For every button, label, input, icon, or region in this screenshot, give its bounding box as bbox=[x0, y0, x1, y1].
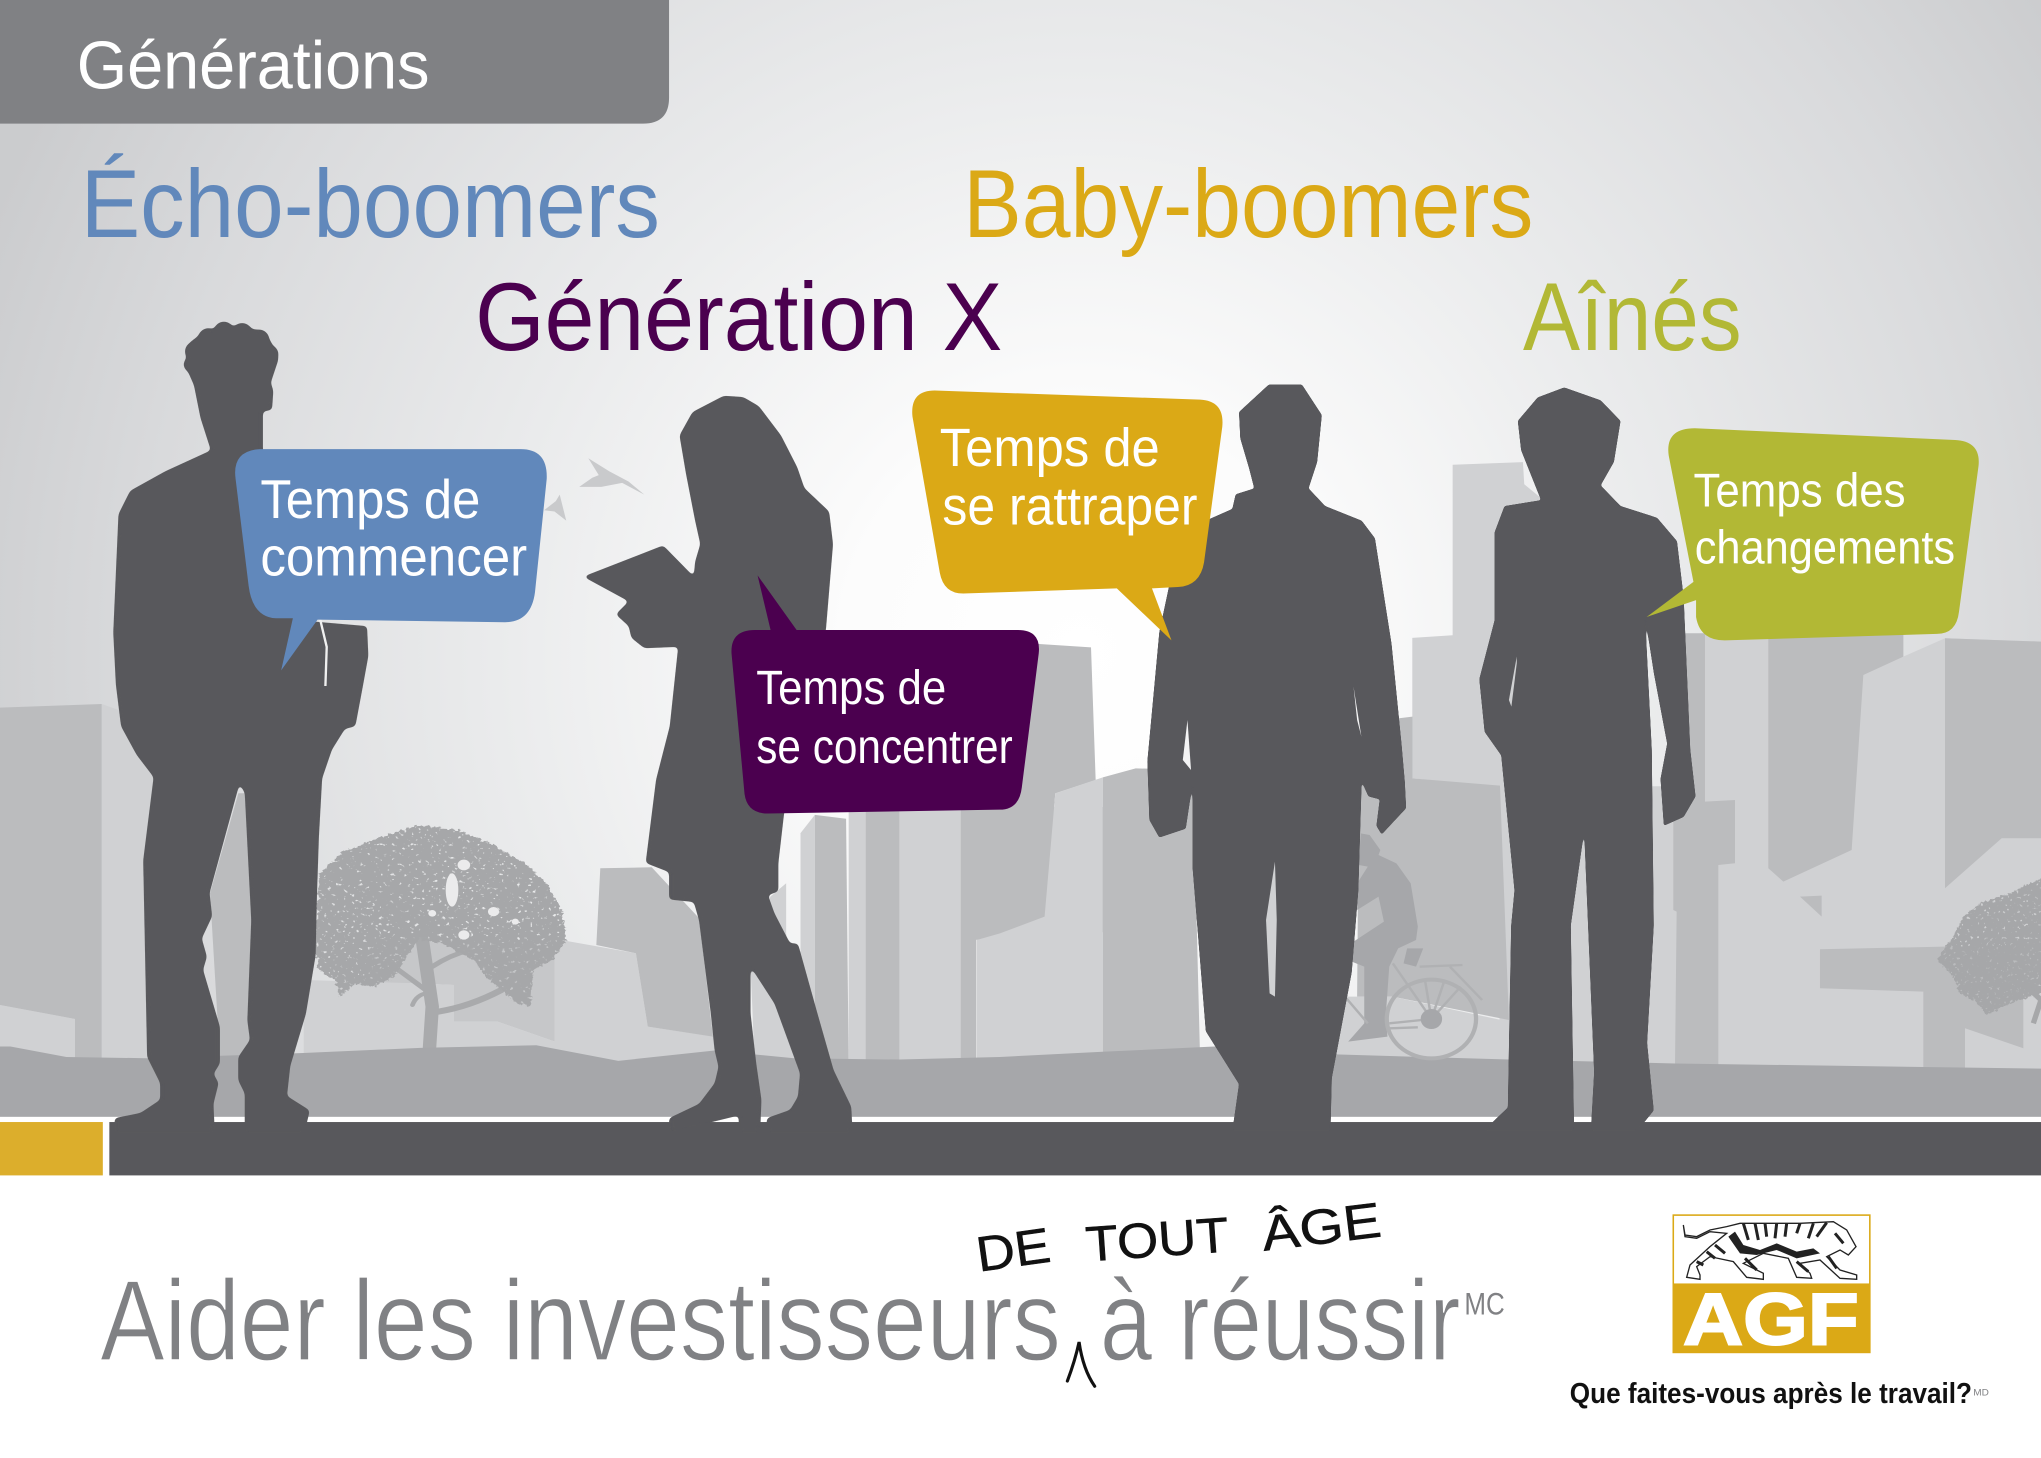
silhouette: génération X woman with book bbox=[583, 396, 853, 1132]
header title: Générations bbox=[77, 29, 430, 104]
cyclist bbox=[1346, 833, 1482, 1058]
gold accent block bbox=[0, 1122, 103, 1175]
speech bubble: commencer: Temps de bbox=[260, 469, 480, 530]
handwritten insert: de tout âge: DE bbox=[973, 1218, 1054, 1283]
tree highlights bbox=[428, 860, 519, 940]
tree trunk and branches bbox=[399, 940, 501, 1048]
tagline mark: MD bbox=[1973, 1387, 1989, 1397]
speech bubble: changements: Temps des bbox=[1693, 464, 1906, 516]
speech bubble: se concentrer bbox=[731, 575, 1039, 814]
slogan: MC bbox=[1464, 1287, 1505, 1322]
background gradient bbox=[0, 0, 2041, 1122]
AGF logo bbox=[1673, 1215, 1870, 1361]
silhouette: écho-boomer man bbox=[113, 322, 368, 1132]
speech bubble: changements bbox=[1647, 428, 1979, 640]
handwritten caret bbox=[1067, 1342, 1095, 1386]
arm gap bbox=[1509, 657, 1517, 707]
rider bbox=[1348, 833, 1418, 1042]
bicycle bbox=[1346, 963, 1482, 1058]
logo wordmark: AGF bbox=[1683, 1280, 1859, 1361]
tagline: Que faites-vous après le travail? bbox=[1570, 1378, 1972, 1410]
speech bubble: se rattraper bbox=[912, 391, 1223, 640]
logo frame bbox=[1673, 1215, 1870, 1352]
ground bbox=[0, 1045, 2041, 1119]
speech bubble: se rattraper: se rattraper bbox=[942, 478, 1198, 537]
tree left bbox=[314, 825, 567, 1048]
figure gaps bbox=[1183, 687, 1361, 997]
logo gold panel bbox=[1673, 1283, 1870, 1352]
silhouette: baby-boomer man bbox=[1147, 384, 1406, 1131]
speech bubble: se rattraper: Temps de bbox=[940, 419, 1160, 478]
jacket fold bbox=[320, 620, 327, 686]
city skyline bbox=[0, 462, 2041, 1073]
slogan: à réussir bbox=[1100, 1257, 1460, 1385]
handwritten insert: de tout âge: ÂGE bbox=[1259, 1193, 1384, 1262]
heading: Aînés: Aînés bbox=[1523, 264, 1742, 371]
dark base bar bbox=[109, 1122, 2041, 1175]
white ground line bbox=[0, 1117, 2041, 1122]
birds bbox=[544, 458, 644, 521]
tree canopy bbox=[314, 825, 567, 1007]
slogan: Aider les investisseurs bbox=[100, 1257, 1061, 1385]
heading: Baby-boomers: Baby-boomers bbox=[963, 151, 1533, 258]
icon: tiger bbox=[1683, 1222, 1857, 1279]
speech bubble: commencer bbox=[235, 449, 547, 670]
header tab bbox=[0, 0, 669, 124]
heading: Écho-boomers: Écho-boomers bbox=[81, 151, 660, 258]
speech bubble: commencer: commencer bbox=[260, 526, 527, 587]
handwritten insert: de tout âge bbox=[973, 1193, 1384, 1283]
speech bubble: changements: changements bbox=[1695, 522, 1955, 574]
speech bubble: se concentrer: Temps de bbox=[756, 661, 946, 715]
speech bubble: se concentrer: se concentrer bbox=[756, 720, 1013, 774]
tree right bbox=[1937, 878, 2041, 1023]
heading: Génération X: Génération X bbox=[475, 264, 1002, 371]
silhouette: aînée woman bbox=[1479, 387, 1696, 1131]
handwritten insert: de tout âge: TOUT bbox=[1084, 1207, 1230, 1272]
